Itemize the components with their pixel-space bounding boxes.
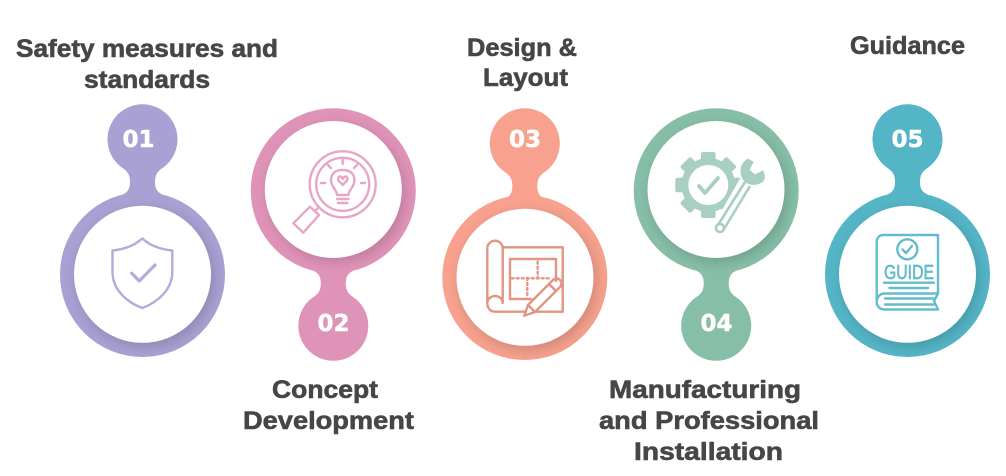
icon: blueprint and pencil (487, 241, 563, 316)
heading: concept development: Concept (272, 376, 379, 404)
step 01 marker (60, 104, 225, 357)
heading: design and layout (467, 34, 577, 92)
number 04: 04 (700, 311, 733, 337)
heading: design and layout: Design & (467, 34, 577, 62)
heading: manufacturing and professional installation: Installation (634, 438, 783, 466)
number 02: 02 (317, 311, 350, 337)
icon: guide book: GUIDE (884, 262, 934, 284)
step 02 marker (251, 108, 416, 361)
step 04 marker (634, 108, 799, 361)
icon: magnifier with light bulb (293, 151, 376, 233)
heading: manufacturing and professional installation: Manufacturing (609, 376, 801, 404)
step 05 marker (825, 104, 990, 357)
heading: manufacturing and professional installation (599, 376, 819, 466)
number 05: 05 (891, 127, 924, 153)
heading: concept development (243, 376, 415, 435)
heading: safety measures and standards: standards (84, 66, 210, 94)
heading: safety measures and standards: Safety measures and (16, 35, 278, 63)
icon: gear and wrench (675, 152, 764, 232)
step 03 marker (442, 108, 607, 360)
heading: manufacturing and professional installation: and Professional (599, 407, 819, 435)
number 01: 01 (122, 127, 155, 153)
heading: safety measures and standards (16, 35, 278, 94)
icon: guide book (877, 235, 938, 310)
heading: guidance: Guidance (850, 32, 965, 60)
number 03: 03 (509, 127, 541, 153)
heading: design and layout: Layout (483, 64, 569, 92)
icon: shield with check (112, 238, 172, 308)
heading: concept development: Development (243, 407, 415, 435)
